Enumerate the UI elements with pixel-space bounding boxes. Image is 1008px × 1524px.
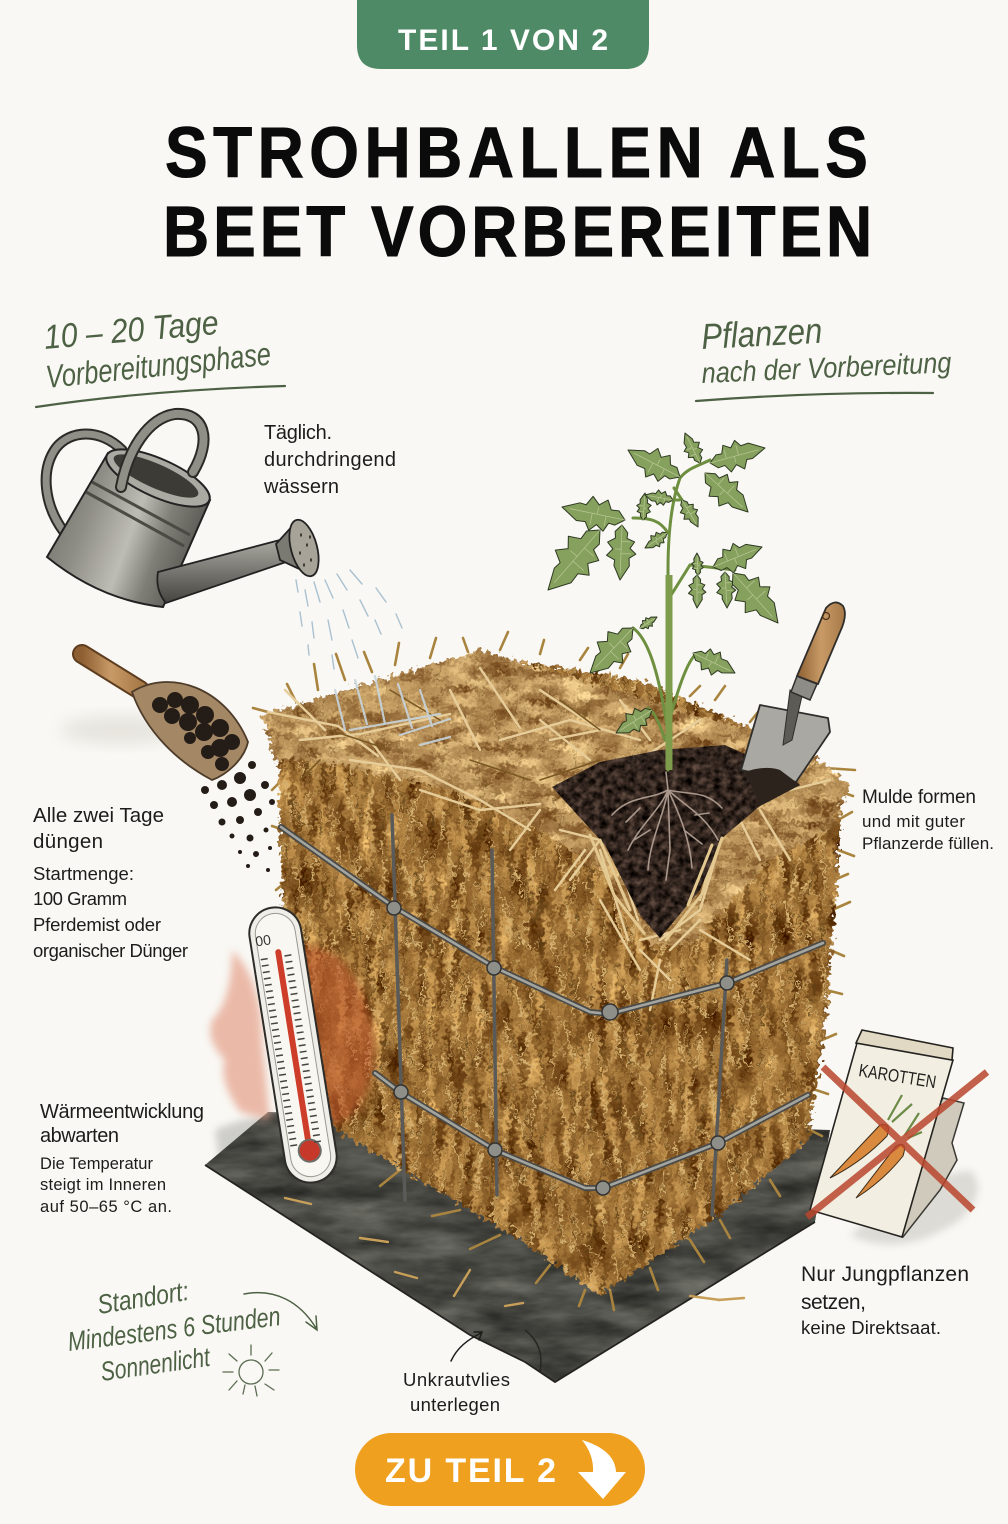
text: fertilising: düngen bbox=[33, 830, 103, 853]
text: young plants: setzen, bbox=[801, 1291, 866, 1314]
tomato seedling bbox=[532, 429, 792, 770]
text: fertilising: Startmenge: bbox=[33, 863, 134, 884]
icon: scoop with fertiliser bbox=[60, 654, 275, 872]
icon: sun bbox=[223, 1345, 279, 1396]
title: STROHBALLEN ALS bbox=[165, 114, 868, 193]
text: heat development: abwarten bbox=[40, 1125, 119, 1147]
heat tint on bale bbox=[300, 945, 375, 1126]
text: young plants bbox=[801, 1263, 969, 1338]
text: fertilising: 100 Gramm bbox=[33, 888, 127, 909]
text: heat development: Die Temperatur bbox=[40, 1155, 154, 1173]
text: fleece: unterlegen bbox=[410, 1394, 500, 1415]
text: heat development bbox=[40, 1101, 204, 1216]
text: heat development: Wärmeentwicklung bbox=[40, 1101, 204, 1123]
wire binding bbox=[281, 815, 823, 1215]
stems bbox=[633, 460, 735, 770]
bale top face bbox=[255, 645, 855, 950]
icon: thermometer: 00 bbox=[254, 931, 272, 950]
handwritten note: location bbox=[66, 1276, 282, 1387]
handwritten heading: preparation phase: Vorbereitungsphase bbox=[44, 336, 272, 395]
arrow: to fleece bbox=[451, 1332, 482, 1361]
icon: trowel bbox=[741, 602, 845, 806]
title: BEET VORBEREITEN bbox=[163, 193, 872, 272]
roots bbox=[612, 772, 722, 880]
button: to part 2 bbox=[355, 1433, 645, 1506]
text: watering: Täglich. bbox=[264, 422, 332, 444]
text: hollow: Mulde formen bbox=[862, 787, 976, 808]
text: fertilising: Pferdemist oder bbox=[33, 914, 161, 935]
bale edge tufts bbox=[253, 632, 855, 1310]
handwritten heading: preparation phase bbox=[36, 304, 285, 407]
water on straw bbox=[335, 676, 450, 745]
text: fertilising bbox=[33, 804, 188, 961]
text: hollow bbox=[862, 787, 994, 853]
icon: watering can bbox=[46, 414, 324, 607]
text: watering: wässern bbox=[263, 476, 339, 498]
text: heat development: auf 50–65 °C an. bbox=[40, 1198, 172, 1216]
badge: Teil 1 von 2 bbox=[357, 0, 649, 69]
planting hollow with soil bbox=[552, 745, 800, 938]
text: hollow: und mit guter bbox=[862, 812, 965, 831]
handwritten note: location: Mindestens 6 Stunden bbox=[66, 1301, 282, 1357]
water drops bbox=[296, 570, 402, 669]
straw bale bbox=[253, 632, 860, 1310]
handwritten heading: planting: Pflanzen bbox=[700, 310, 823, 357]
icon: crossed-out seed packet bbox=[807, 1030, 987, 1245]
text: fleece bbox=[403, 1369, 510, 1415]
arrow: location note bbox=[244, 1293, 317, 1330]
handwritten heading: planting: nach der Vorbereitung bbox=[701, 347, 952, 390]
text: fertilising: Alle zwei Tage bbox=[33, 804, 164, 827]
badge: Teil 1 von 2: TEIL 1 VON 2 bbox=[398, 24, 608, 57]
title bbox=[163, 114, 872, 272]
text: heat development: steigt im Inneren bbox=[40, 1176, 166, 1194]
text: watering bbox=[263, 422, 396, 498]
handwritten heading: preparation phase: 10 – 20 Tage bbox=[42, 304, 220, 357]
button: to part 2: ZU TEIL 2 bbox=[385, 1452, 556, 1490]
rim of hollow bbox=[590, 835, 722, 940]
text: fertilising: organischer Dünger bbox=[33, 940, 188, 961]
weed fleece bbox=[200, 1100, 840, 1390]
heat glow behind thermometer bbox=[210, 950, 270, 1120]
icon: crossed-out seed packet: KAROTTEN bbox=[857, 1060, 938, 1092]
icon: thermometer bbox=[246, 904, 340, 1186]
text: hollow: Pflanzerde füllen. bbox=[862, 834, 994, 853]
handwritten note: location: Sonnenlicht bbox=[99, 1342, 213, 1387]
text: young plants: Nur Jungpflanzen bbox=[801, 1263, 969, 1286]
leaves bbox=[532, 516, 616, 604]
loose straw on top bbox=[268, 668, 830, 1010]
handwritten heading: planting bbox=[696, 310, 952, 401]
text: fleece: Unkrautvlies bbox=[403, 1369, 510, 1390]
text: young plants: keine Direktsaat. bbox=[801, 1317, 941, 1338]
text: watering: durchdringend bbox=[264, 449, 396, 471]
handwritten note: location: Standort: bbox=[95, 1276, 191, 1320]
icon: curved arrow down bbox=[578, 1440, 626, 1499]
